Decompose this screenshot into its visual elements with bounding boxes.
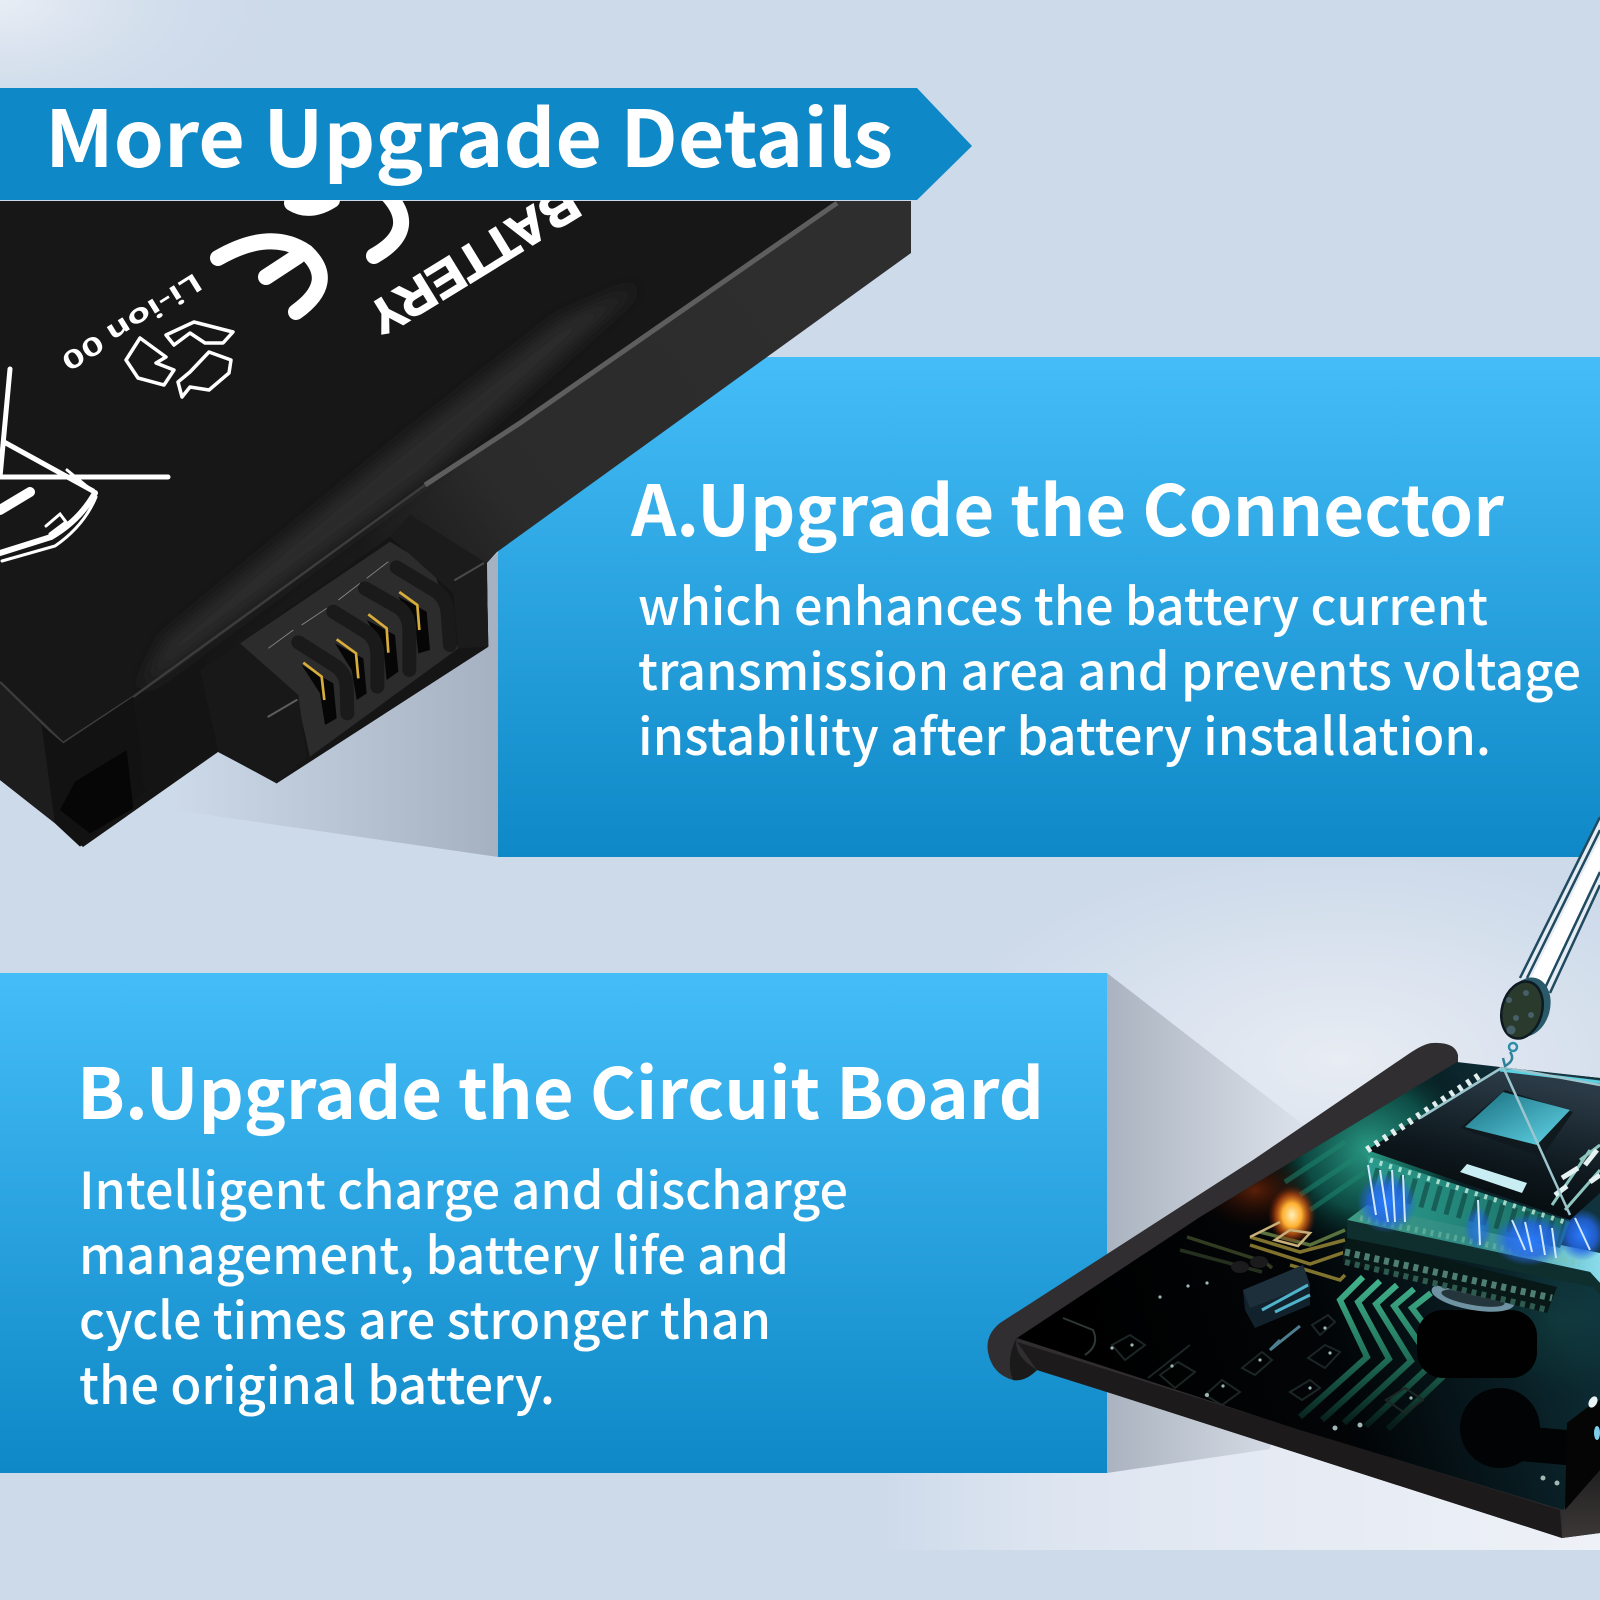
left end block	[200, 643, 307, 783]
black capacitor pad	[1460, 1388, 1540, 1468]
title: More Upgrade Details	[45, 78, 893, 190]
board frame	[988, 1043, 1600, 1538]
right end block	[390, 515, 488, 648]
pad dots	[1110, 1281, 1574, 1490]
lower chip	[1347, 1205, 1600, 1295]
lower face plane	[0, 310, 534, 743]
gold traces	[1180, 1230, 1345, 1280]
body text A	[638, 566, 1581, 770]
end cap	[1562, 1450, 1600, 1538]
probe tool	[1495, 817, 1600, 1066]
faint traces near rail	[1284, 1140, 1366, 1212]
body text A: which enhances the battery current	[638, 566, 1488, 640]
body text A: transmission area and prevents voltage	[638, 631, 1581, 705]
pad outlines	[1063, 1315, 1423, 1413]
large crystal component	[1417, 1277, 1537, 1378]
battery end and connector	[0, 515, 488, 847]
teal glow	[1277, 1082, 1455, 1239]
body text B: cycle times are stronger than	[79, 1280, 771, 1354]
battery photo: connector end	[0, 175, 911, 847]
contact slots	[302, 597, 430, 725]
red LED wash	[1216, 1166, 1302, 1222]
chip traces	[1552, 1145, 1600, 1210]
panel A	[498, 357, 1600, 857]
LED glow	[1250, 1185, 1316, 1246]
end notch	[60, 750, 133, 833]
circuit board battery photo	[988, 817, 1600, 1538]
bevel highlight	[425, 203, 837, 485]
upper chip	[1367, 1067, 1600, 1222]
body text B	[79, 1150, 848, 1419]
small crystal	[1243, 1265, 1310, 1328]
heading B: B.Upgrade the Circuit Board	[77, 1039, 1044, 1140]
body text B: management, battery life and	[79, 1215, 789, 1289]
bottom rail	[1017, 1342, 1562, 1538]
body text A: instability after battery installation.	[638, 696, 1491, 770]
title banner	[0, 78, 972, 200]
top face sheen	[140, 285, 640, 690]
gold pins	[303, 592, 419, 700]
contact ribs	[298, 567, 450, 713]
chip legs	[1367, 1155, 1570, 1248]
lower chip pin rows	[1343, 1245, 1557, 1313]
chip die	[1460, 1090, 1573, 1157]
contact recess	[240, 542, 458, 757]
battery side silhouette	[0, 201, 911, 847]
printed label: BATTERY: BATTERY	[358, 175, 590, 347]
panel B	[0, 973, 1107, 1473]
probe lines	[1420, 1067, 1600, 1215]
battery top face	[0, 201, 837, 743]
board contents	[1063, 1040, 1600, 1510]
icon: recycle symbol	[126, 322, 233, 397]
shadow behind panel B	[1107, 973, 1310, 1473]
body text B: Intelligent charge and discharge	[79, 1150, 848, 1224]
printed label: Li-ion 00: Li-ion 00	[55, 265, 210, 381]
body text B: the original battery.	[79, 1345, 555, 1419]
board surface	[1017, 1062, 1600, 1510]
blue glow effects	[1357, 1165, 1600, 1266]
icon: crossed-out bin	[0, 369, 168, 561]
chip label	[1460, 1164, 1527, 1193]
heading A: A.Upgrade the Connector	[630, 456, 1504, 557]
shadow behind panel A	[160, 552, 498, 857]
connector housing	[200, 515, 488, 783]
green chevron traces	[1300, 1277, 1455, 1429]
rail tip shade	[1010, 1337, 1037, 1380]
printed label: CE mark	[218, 195, 401, 312]
capacitor dots	[1231, 1256, 1268, 1273]
